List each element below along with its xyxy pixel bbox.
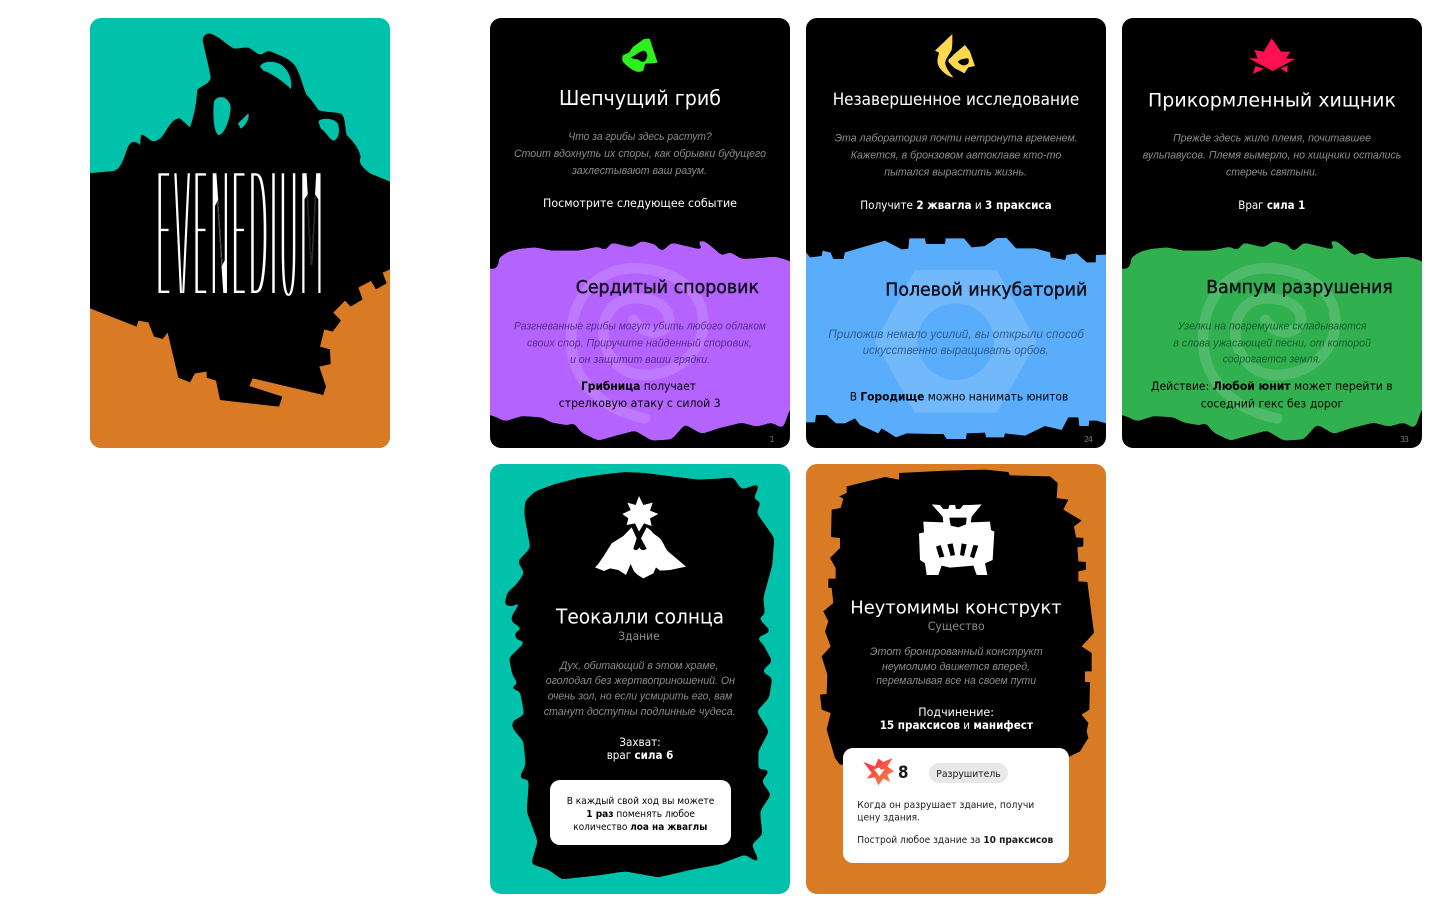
title: Незавершенное исследование xyxy=(833,90,1079,110)
flavour text: Узелки на погремушке складываются xyxy=(1177,320,1367,332)
capture text: враг сила 6 xyxy=(607,748,673,762)
ability box: 1 раз поменять любое xyxy=(586,809,695,820)
title: Прикормленный хищник xyxy=(1148,90,1396,112)
flavour text: перемалывая все на своем пути xyxy=(876,675,1036,687)
cover logo wordmark: EVENEDIUM xyxy=(155,121,324,354)
cover black silhouette xyxy=(80,34,400,407)
title: Теокалли солнца xyxy=(555,605,724,629)
title: Неутомимы конструкт xyxy=(850,598,1062,619)
card: tireless construct xyxy=(806,464,1106,894)
effect text xyxy=(1151,379,1393,411)
ability text xyxy=(857,800,1053,846)
icon: yellow arrow xyxy=(935,34,975,77)
page number: 33 xyxy=(1400,435,1409,444)
effect text: В Городище можно нанимать юнитов xyxy=(850,390,1068,404)
flavour text: Этот бронированный конструкт xyxy=(870,646,1043,658)
flavour text: пытался вырастить жизнь. xyxy=(884,167,1027,179)
flavour text xyxy=(544,660,736,718)
effect text: стрелковую атаку с силой 3 xyxy=(559,396,721,410)
card: cover xyxy=(80,18,400,448)
flavour text: вульпавусов. Племя вымерло, но хищники остались xyxy=(1143,150,1401,162)
title: Шепчущий гриб xyxy=(559,86,721,110)
flavour text: Что за грибы здесь растут? xyxy=(568,131,713,143)
effect text: Грибница получает xyxy=(581,379,696,393)
ability text: цену здания. xyxy=(857,812,920,823)
flavour text xyxy=(1173,320,1371,366)
card: whispering mushroom xyxy=(478,18,802,448)
subjugation text: 15 праксисов и манифест xyxy=(880,718,1033,732)
heading: Полевой инкубаторий xyxy=(885,280,1087,301)
icon: temple and sun xyxy=(595,496,686,578)
flavour text xyxy=(870,646,1043,687)
subjugation text: Подчинение: xyxy=(918,705,994,719)
flavour text: Дух, обитающий в этом храме, xyxy=(558,660,718,672)
flavour text xyxy=(828,327,1085,357)
black torn shape xyxy=(820,470,1094,765)
ability text: Построй любое здание за 10 праксисов xyxy=(857,835,1053,846)
effect text: Действие: Любой юнит может перейти в xyxy=(1151,379,1393,393)
panel: wampum of destruction xyxy=(1109,241,1433,441)
flavour text: Приложив немало усилий, вы открыли способ xyxy=(828,327,1085,341)
flavour text: Эта лаборатория почти нетронута временем. xyxy=(835,133,1078,145)
flavour text: и он защитит ваши грядки. xyxy=(570,354,710,366)
effect text: соседний гекс без дорог xyxy=(1201,397,1343,411)
subjugation text xyxy=(880,705,1033,732)
icon: red leaf xyxy=(1249,38,1295,74)
flavour text: станут доступны подлинные чудеса. xyxy=(544,706,736,718)
capture text xyxy=(607,735,673,762)
flavour text: своих спор. Приручите найденный споровик, xyxy=(527,338,752,350)
flavour text: неумолимо движется вперед, xyxy=(882,661,1030,673)
flavour text: захлестывают ваш разум. xyxy=(571,165,707,177)
tag pill xyxy=(929,763,1008,783)
flavour text: Разгневанные грибы могут убить любого облаком xyxy=(514,320,766,332)
flavour text: стеречь святыни. xyxy=(1226,167,1318,179)
ability box: В каждый свой ход вы можете xyxy=(567,796,714,807)
card: teocalli of the sun xyxy=(490,464,790,894)
flavour text xyxy=(835,133,1078,179)
heading: Сердитый споровик xyxy=(576,277,759,298)
black blob xyxy=(504,472,774,879)
effect text xyxy=(559,379,721,410)
flavour text xyxy=(514,131,766,177)
card: fed predator xyxy=(1109,18,1433,448)
flavour text: в слова ужасающей песни, от которой xyxy=(1173,338,1371,350)
flavour text: Кажется, в бронзовом автоклаве кто-то xyxy=(851,150,1061,162)
flavour text: искусственно выращивать орбов. xyxy=(863,343,1049,357)
purple splat xyxy=(478,241,802,441)
flavour text: Стоит вдохнуть их споры, как обрывки будущего xyxy=(514,148,766,160)
capture text: Захват: xyxy=(619,735,661,749)
icon: construct xyxy=(919,504,994,575)
ability box xyxy=(843,748,1069,863)
heading: Вампум разрушения xyxy=(1206,277,1393,298)
card: unfinished research xyxy=(793,18,1117,448)
panel: angry puffball xyxy=(478,241,802,441)
green splat xyxy=(1109,241,1433,441)
panel: field incubator xyxy=(793,238,1117,439)
icon: burst xyxy=(863,758,894,785)
flavour text xyxy=(514,320,766,366)
flavour text xyxy=(1143,133,1401,179)
effect text: Враг сила 1 xyxy=(1238,198,1305,212)
ability box: количество лоа на жваглы xyxy=(573,822,707,833)
type label: Здание xyxy=(618,629,660,643)
page number: 1 xyxy=(770,435,775,444)
flavour text: содрогается земля. xyxy=(1223,354,1321,366)
icon: green mushroom xyxy=(622,39,658,72)
flavour text: оголодал без жертвоприношений. Он xyxy=(546,675,735,687)
blue torn panel xyxy=(793,238,1117,439)
strength value: 8 xyxy=(898,763,908,783)
effect text: Получите 2 жвагла и 3 праксиса xyxy=(860,198,1052,212)
tag pill: Разрушитель xyxy=(936,769,1001,780)
flavour text: очень зол, но если усмирить его, вам xyxy=(548,691,733,703)
page number: 24 xyxy=(1084,435,1093,444)
effect text: Посмотрите следующее событие xyxy=(543,196,737,210)
type label: Существо xyxy=(928,619,985,633)
flavour text: Прежде здесь жило племя, почитавшее xyxy=(1173,133,1371,145)
ability text: Когда он разрушает здание, получи xyxy=(857,800,1034,811)
ability box xyxy=(550,780,731,845)
